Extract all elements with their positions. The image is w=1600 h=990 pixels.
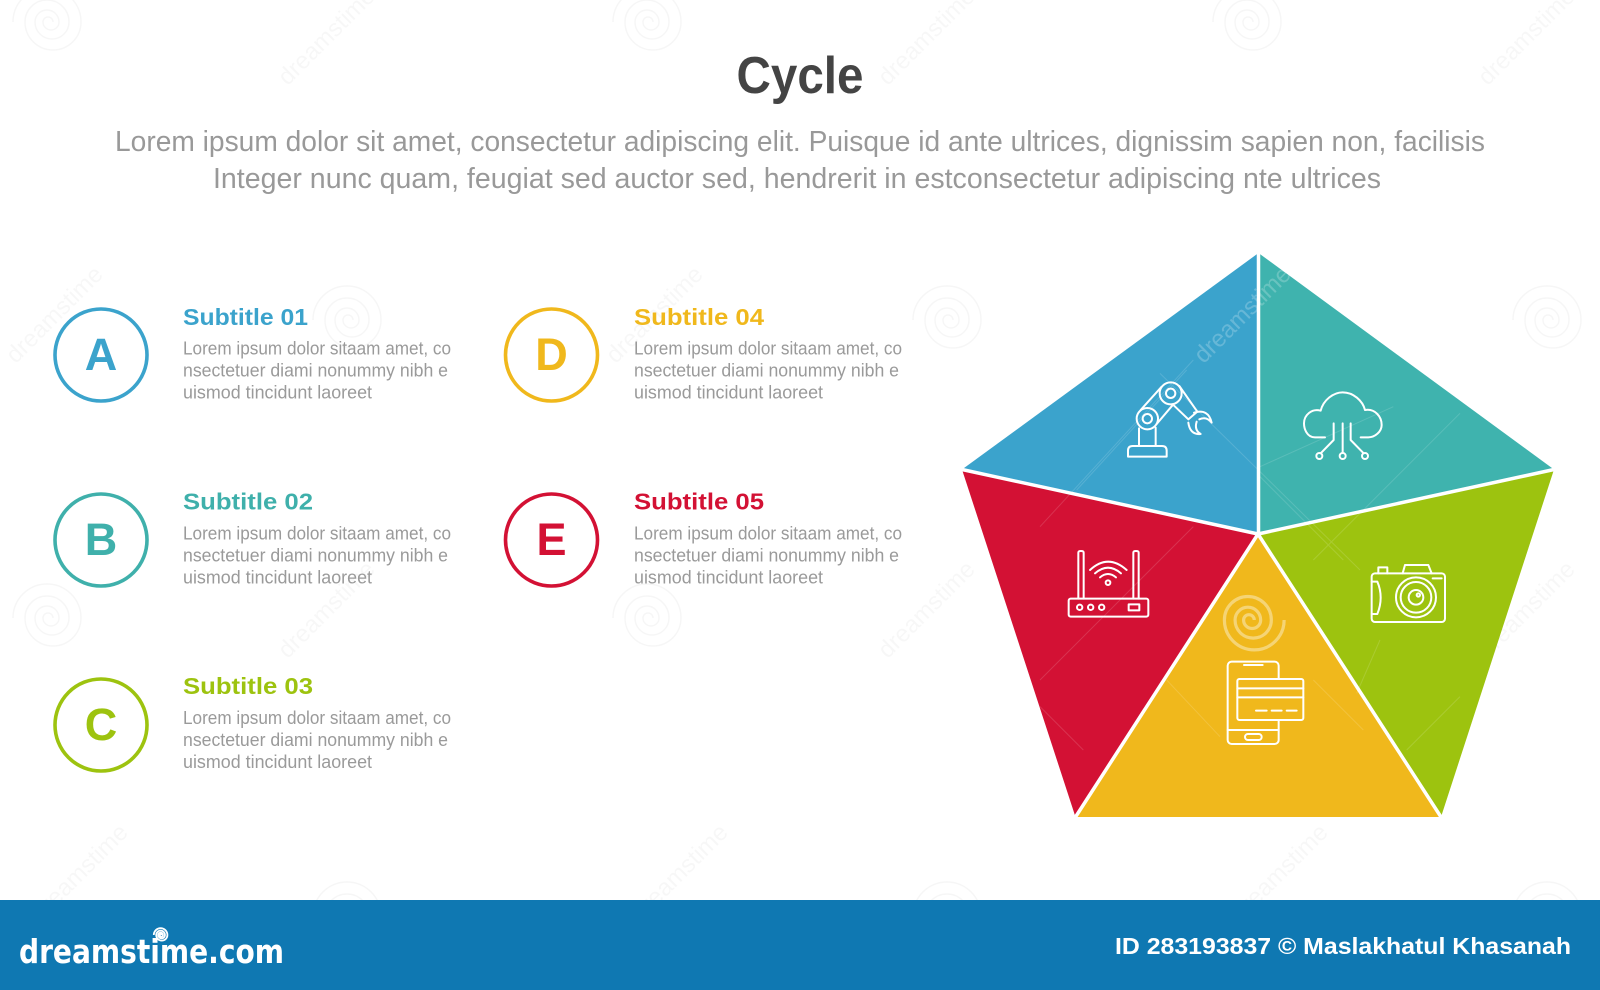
item B xyxy=(55,489,451,587)
watermark background: dreamstime xyxy=(273,556,381,664)
item E xyxy=(506,489,902,587)
description B: nsectetuer diami nonummy nibh e xyxy=(183,545,448,565)
description E: nsectetuer diami nonummy nibh e xyxy=(634,545,899,565)
watermark swirl on yellow xyxy=(1224,597,1284,650)
intro text: Integer nunc quam, feugiat sed auctor sed, hendrerit in estconsectetur adipiscing nte ultrices xyxy=(213,163,1381,195)
badge A: A xyxy=(85,329,117,380)
description D: uismod tincidunt laoreet xyxy=(634,383,823,403)
description B xyxy=(183,523,451,587)
subtitle 05: Subtitle 05 xyxy=(634,489,764,515)
image credit: ID 283193837 © Maslakhatul Khasanah xyxy=(1115,933,1571,959)
watermark background: dreamstime xyxy=(26,819,134,927)
icon: camera xyxy=(1372,565,1445,622)
description A: nsectetuer diami nonummy nibh e xyxy=(183,361,448,381)
description E xyxy=(634,523,902,587)
description D xyxy=(634,339,902,403)
subtitle 04: Subtitle 04 xyxy=(634,304,764,330)
description B: uismod tincidunt laoreet xyxy=(183,567,372,587)
icon: router xyxy=(1069,551,1148,617)
badge E: E xyxy=(536,514,567,565)
description C: nsectetuer diami nonummy nibh e xyxy=(183,730,448,750)
icon: robot arm xyxy=(1128,382,1212,457)
description A xyxy=(183,339,451,403)
segment: blue xyxy=(962,253,1258,534)
badge D: D xyxy=(535,329,568,380)
segment: yellow xyxy=(1076,534,1441,817)
badge E xyxy=(506,494,598,586)
description E: Lorem ipsum dolor sitaam amet, co xyxy=(634,523,902,543)
badge A xyxy=(55,309,147,401)
segment: green xyxy=(1258,470,1554,817)
description A: uismod tincidunt laoreet xyxy=(183,383,372,403)
watermark background: dreamstime xyxy=(1226,819,1334,927)
subtitle 02: Subtitle 02 xyxy=(183,489,313,515)
subtitle 01: Subtitle 01 xyxy=(183,304,308,330)
intro text: Lorem ipsum dolor sit amet, consectetur adipiscing elit. Puisque id ante ultrices, dignissim sapien non, facilisis xyxy=(115,126,1485,158)
badge C xyxy=(55,679,147,771)
description C: Lorem ipsum dolor sitaam amet, co xyxy=(183,708,451,728)
item D xyxy=(506,304,902,403)
segment: red xyxy=(962,470,1258,817)
description D: nsectetuer diami nonummy nibh e xyxy=(634,361,899,381)
footer logo: dreamstime.com xyxy=(19,932,284,971)
segment: teal xyxy=(1258,253,1554,534)
watermark text on pentagon: dreamstime xyxy=(1189,261,1297,369)
description E: uismod tincidunt laoreet xyxy=(634,567,823,587)
description C: uismod tincidunt laoreet xyxy=(183,752,372,772)
footer bar xyxy=(0,900,1600,990)
item A xyxy=(55,304,451,403)
watermark background: dreamstime xyxy=(626,819,734,927)
icon: cloud circuit xyxy=(1304,392,1382,459)
icon: phone and card xyxy=(1228,662,1303,744)
description A: Lorem ipsum dolor sitaam amet, co xyxy=(183,339,451,359)
badge C: C xyxy=(85,699,117,750)
watermark background: dreamstime xyxy=(873,556,981,664)
badge D xyxy=(506,309,598,401)
badge B xyxy=(55,494,147,586)
title: Cycle xyxy=(736,47,864,105)
watermark background: dreamstime xyxy=(1473,556,1581,664)
badge B: B xyxy=(85,514,117,565)
item C xyxy=(55,673,451,772)
description D: Lorem ipsum dolor sitaam amet, co xyxy=(634,339,902,359)
watermark background: dreamstime xyxy=(1,261,109,369)
description C xyxy=(183,708,451,772)
subtitle 03: Subtitle 03 xyxy=(183,673,313,699)
watermark background: dreamstime xyxy=(601,261,709,369)
pentagon chart xyxy=(962,250,1554,817)
description B: Lorem ipsum dolor sitaam amet, co xyxy=(183,523,451,543)
intro text xyxy=(115,126,1485,195)
